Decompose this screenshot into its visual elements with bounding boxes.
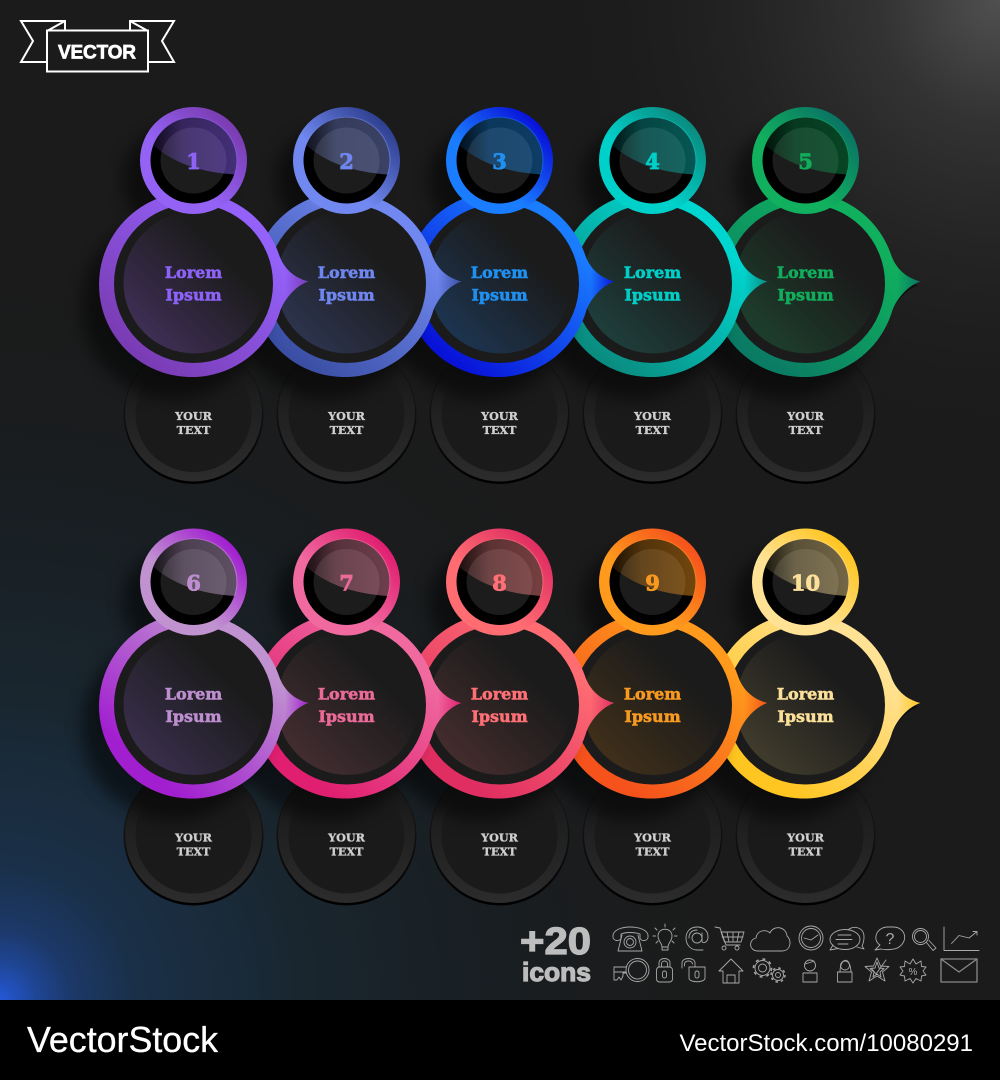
step 6: Ipsum — [165, 707, 222, 726]
icon: star with check — [865, 958, 889, 981]
badge: vector ribbon — [21, 21, 174, 72]
your text circle 7: YOUR — [327, 830, 366, 844]
step 9 — [540, 528, 767, 820]
icon: cloud — [751, 928, 790, 951]
step 4: Ipsum — [624, 286, 681, 304]
your text circle 4 — [582, 344, 722, 484]
heading: +20 icons — [520, 921, 591, 987]
step 4 — [540, 107, 767, 398]
icon: woman — [838, 960, 852, 982]
footer brand: VectorStock — [27, 1020, 218, 1060]
step 1: 1 — [186, 149, 201, 174]
your text circle 6: TEXT — [177, 844, 211, 858]
step 6: 6 — [186, 570, 201, 596]
row 2 lower circles — [124, 766, 876, 906]
step 2: Ipsum — [318, 286, 375, 304]
icon: magnifier — [912, 928, 936, 950]
your text circle 7: TEXT — [330, 844, 364, 858]
step 8 — [388, 528, 614, 820]
icon: gears — [754, 959, 785, 982]
your text circle 2: YOUR — [327, 409, 366, 423]
icon set — [613, 924, 979, 983]
step 8: 8 — [492, 570, 507, 596]
your text circle 9: YOUR — [633, 830, 672, 844]
step 3 — [388, 107, 614, 398]
your text circle 1: TEXT — [177, 423, 211, 437]
step 9: Lorem — [624, 684, 681, 704]
step 9: Ipsum — [624, 707, 681, 726]
step 7 — [234, 528, 461, 820]
step 6: Lorem — [165, 684, 222, 704]
row 1 lower circles — [124, 344, 876, 484]
icon: light bulb — [653, 924, 677, 950]
heading: +20 icons: +20 — [520, 921, 591, 963]
footer image id: VectorStock.com/10080291 — [679, 1030, 973, 1057]
step 5 — [694, 107, 920, 398]
icon: open lock — [682, 958, 705, 982]
step 2 — [234, 107, 461, 398]
icon: key — [614, 958, 649, 982]
your text circle 1 — [124, 344, 264, 484]
step 7: Ipsum — [318, 707, 375, 726]
your text circle 10 — [736, 766, 876, 906]
heading: +20 icons: icons — [522, 957, 591, 987]
icon: clock — [799, 926, 823, 950]
your text circle 6 — [124, 766, 264, 906]
your text circle 5: TEXT — [789, 423, 823, 437]
icon: discount burst: % — [909, 967, 918, 978]
icon: telephone — [613, 927, 648, 951]
step 4: Lorem — [624, 263, 681, 282]
icon: chat bubbles — [830, 927, 864, 950]
badge: vector ribbon: VECTOR — [58, 42, 136, 64]
step 2: 2 — [339, 149, 354, 174]
step 7: Lorem — [318, 684, 375, 704]
your text circle 10: TEXT — [789, 844, 823, 858]
your text circle 8: YOUR — [480, 830, 519, 844]
icon: envelope — [941, 959, 977, 982]
your text circle 8 — [430, 766, 570, 906]
your text circle 5: YOUR — [786, 409, 825, 423]
your text circle 7 — [276, 766, 416, 906]
your text circle 6: YOUR — [174, 830, 213, 844]
your text circle 9: TEXT — [636, 844, 670, 858]
icon: question bubble: ? — [886, 931, 895, 948]
your text circle 9 — [582, 766, 722, 906]
step 4: 4 — [645, 149, 660, 174]
icon: line chart — [944, 927, 979, 950]
step 1 — [82, 107, 308, 398]
step 10: Ipsum — [777, 707, 834, 726]
step 3: Ipsum — [471, 286, 528, 304]
icon: house — [719, 959, 743, 983]
icon: at sign — [686, 927, 708, 950]
step 7: 7 — [339, 570, 354, 596]
step 1: Ipsum — [165, 286, 222, 304]
step 10: 10 — [791, 570, 820, 596]
step 10 — [694, 528, 920, 820]
icon: discount burst — [900, 959, 926, 983]
step 9: 9 — [645, 570, 660, 596]
your text circle 2 — [276, 344, 416, 484]
icon: closed lock — [656, 958, 672, 982]
icon: question bubble — [875, 927, 905, 950]
step 6 — [82, 528, 308, 820]
step 8: Ipsum — [471, 707, 528, 726]
your text circle 5 — [736, 344, 876, 484]
icon: man — [803, 960, 817, 982]
step 3: 3 — [492, 149, 507, 174]
your text circle 2: TEXT — [330, 423, 364, 437]
your text circle 4: YOUR — [633, 409, 672, 423]
your text circle 8: TEXT — [483, 844, 517, 858]
step 2: Lorem — [318, 263, 375, 282]
step 5: Lorem — [777, 263, 834, 282]
step 5: Ipsum — [777, 286, 834, 304]
your text circle 3: YOUR — [480, 409, 519, 423]
your text circle 4: TEXT — [636, 423, 670, 437]
your text circle 10: YOUR — [786, 830, 825, 844]
step 1: Lorem — [165, 263, 222, 282]
your text circle 3: TEXT — [483, 423, 517, 437]
step 5: 5 — [798, 149, 813, 174]
step 8: Lorem — [471, 684, 528, 704]
step 10: Lorem — [777, 684, 834, 704]
icon: shopping cart — [715, 927, 744, 950]
your text circle 1: YOUR — [174, 409, 213, 423]
your text circle 3 — [430, 344, 570, 484]
step 3: Lorem — [471, 263, 528, 282]
footer bar — [0, 1000, 1000, 1080]
